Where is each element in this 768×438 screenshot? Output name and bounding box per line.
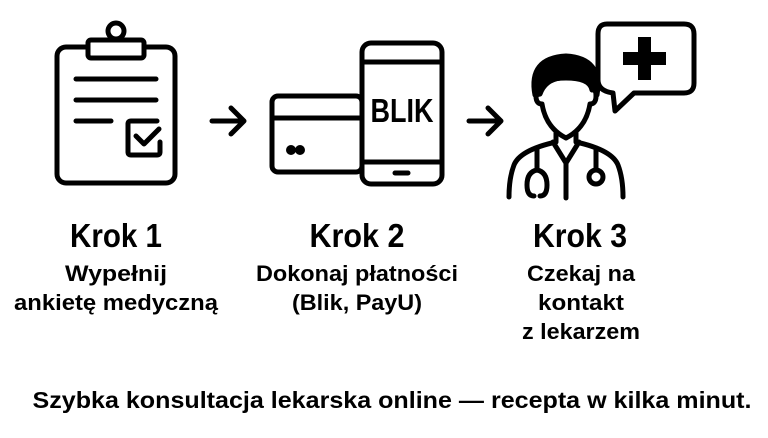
BLIK label: BLIK <box>370 92 434 129</box>
phone <box>362 43 442 184</box>
step 1 text: Wypełnij <box>65 261 167 286</box>
cross <box>623 37 666 80</box>
step 1 text: ankietę medyczną <box>14 290 219 315</box>
card <box>272 96 362 172</box>
icon: clipboard <box>57 23 175 183</box>
step 3 text: z lekarzem <box>522 319 640 344</box>
step 1 text: Krok 1 <box>70 217 162 254</box>
icon: card and phone <box>272 43 442 184</box>
doctor <box>509 56 623 198</box>
step 3 text <box>522 217 640 344</box>
step 2 text: (Blik, PayU) <box>292 290 422 315</box>
step 2 text: Dokonaj płatności <box>256 261 458 286</box>
speech bubble <box>598 24 694 111</box>
caption: Szybka konsultacja lekarska online — recepta w kilka minut. <box>32 387 752 413</box>
step 1 text <box>14 217 219 315</box>
icon: doctor with speech bubble <box>509 24 694 198</box>
step 3 text: kontakt <box>538 290 625 315</box>
arrow 1 <box>212 108 244 134</box>
step 2 text: Krok 2 <box>310 217 404 254</box>
arrow 2 <box>469 108 501 134</box>
step 2 text <box>256 217 458 315</box>
step 3 text: Czekaj na <box>527 261 636 286</box>
step 3 text: Krok 3 <box>533 217 627 254</box>
